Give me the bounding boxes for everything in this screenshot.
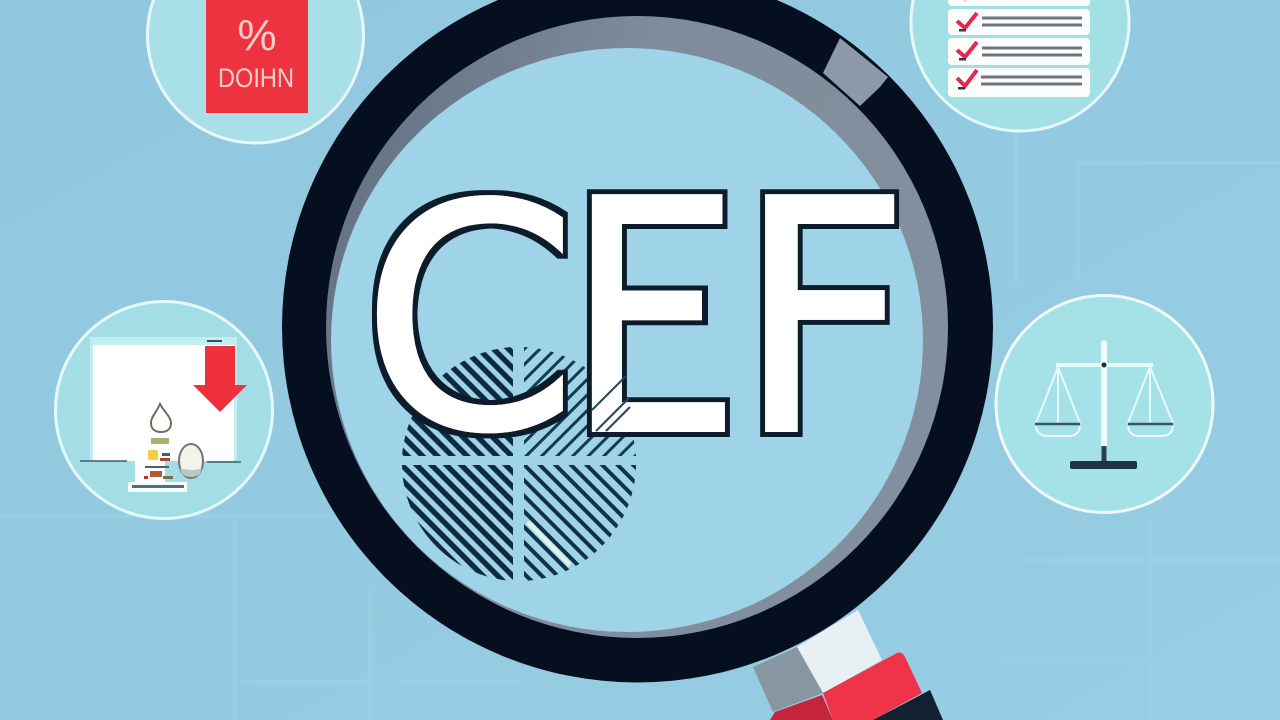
hatch over letter E: [592, 376, 630, 431]
scale: [1035, 343, 1173, 469]
icon circle: percent down: [148, 0, 364, 143]
rim notch: [823, 38, 888, 106]
red percent tag: [206, 0, 308, 113]
base lines: [80, 461, 241, 462]
CEF heading: [361, 132, 910, 507]
magnifying glass rim: [282, 0, 993, 682]
lens glass: [331, 48, 923, 632]
icon circle: checklist: [911, 0, 1129, 131]
red percent tag: DOIHN: [218, 63, 294, 93]
icon circle: balance scale: [996, 296, 1213, 512]
magnifying glass handle: [753, 610, 943, 720]
CEF heading: E: [566, 132, 741, 507]
red percent tag: %: [237, 11, 277, 60]
document: [90, 337, 237, 461]
gray inner rim: [326, 16, 948, 638]
red down arrow: [193, 346, 247, 412]
hatched pie chart: [402, 347, 636, 581]
small illustration cluster: [128, 404, 203, 492]
icon circle: falling chart document: [56, 302, 272, 518]
CEF heading: C: [361, 140, 578, 502]
checklist rows: [948, 0, 1090, 97]
CEF heading: F: [737, 132, 910, 507]
